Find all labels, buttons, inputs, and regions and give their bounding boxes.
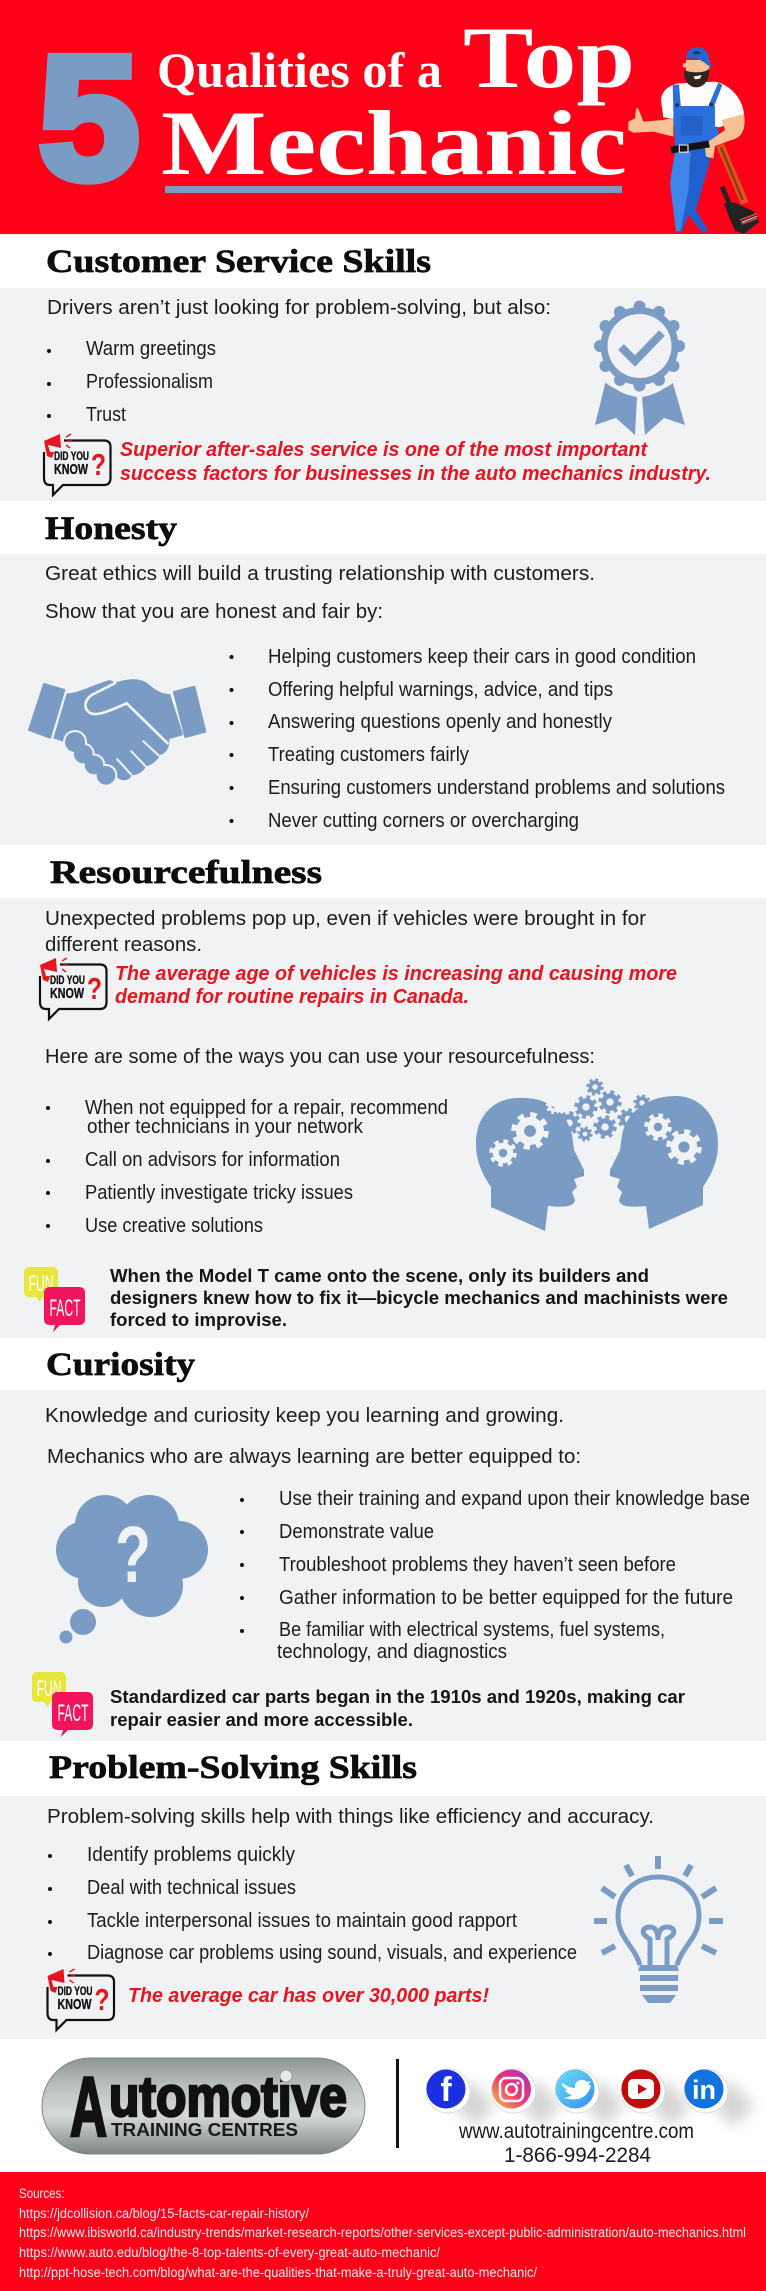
divider xyxy=(396,2059,399,2148)
callout: did you know: demand for routine repairs in Canada. xyxy=(115,986,469,1008)
bullet list: Offering helpful warnings, advice, and tips xyxy=(268,679,613,701)
callout: fun fact xyxy=(32,1672,685,1737)
icon: linkedin xyxy=(684,2070,724,2108)
website: www.autotrainingcentre.com xyxy=(458,2120,694,2143)
icon: fun fact xyxy=(32,1672,93,1737)
bullet list xyxy=(46,1097,448,1237)
bullet list: other technicians in your network xyxy=(87,1116,364,1138)
icon: fun fact: FUN xyxy=(36,1676,62,1701)
section: Curiosity xyxy=(0,1338,766,1741)
bullet list: Answering questions openly and honestly xyxy=(268,711,612,733)
intro text xyxy=(45,908,646,956)
social icons xyxy=(426,2069,754,2128)
icon: did you know: DID YOU xyxy=(58,1986,92,1998)
callout: did you know xyxy=(40,958,677,1019)
icon: light bulb xyxy=(594,1856,723,2003)
icon: did you know: ? xyxy=(91,447,106,482)
list intro: Here are some of the ways you can use your resourcefulness: xyxy=(45,1046,595,1068)
bullet list: Never cutting corners or overcharging xyxy=(268,810,579,832)
icon: handshake xyxy=(29,679,205,787)
illustration: mechanic xyxy=(628,47,759,234)
bullet list: Demonstrate value xyxy=(279,1521,434,1543)
bullet list: Warm greetings xyxy=(86,338,216,360)
bullet list: Use creative solutions xyxy=(85,1215,263,1237)
bullet list: Ensuring customers understand problems and solutions xyxy=(268,777,725,799)
intro text: different reasons. xyxy=(45,934,202,956)
intro text: Show that you are honest and fair by: xyxy=(45,601,383,623)
icon: did you know: KNOW xyxy=(58,1996,92,2013)
intro text: Unexpected problems pop up, even if vehicles were brought in for xyxy=(45,908,646,930)
intro text: Mechanics who are always learning are better equipped to: xyxy=(47,1446,581,1468)
callout: fun fact: repair easier and more accessible. xyxy=(110,1710,413,1730)
bullet list: When not equipped for a repair, recommend xyxy=(85,1097,448,1119)
section: Problem-Solving Skills xyxy=(0,1741,766,2039)
sources panel xyxy=(0,2172,766,2291)
section: Customer Service Skills xyxy=(0,234,766,501)
bullet list: technology, and diagnostics xyxy=(277,1641,507,1663)
bullet list: Helping customers keep their cars in good condition xyxy=(268,646,696,668)
bullet list: Diagnose car problems using sound, visuals, and experience xyxy=(87,1942,577,1964)
icon: thought cloud: ? xyxy=(115,1510,151,1599)
intro text xyxy=(45,563,595,623)
bullet list: Professionalism xyxy=(86,371,213,393)
bullet list xyxy=(230,646,725,832)
bullet list: Gather information to be better equipped for the future xyxy=(279,1587,733,1609)
icon: fun fact: FUN xyxy=(28,1271,54,1296)
icon: did you know xyxy=(40,958,106,1019)
phone: 1-866-994-2284 xyxy=(504,2144,651,2167)
intro text xyxy=(45,1405,581,1468)
bullet list: Treating customers fairly xyxy=(268,744,469,766)
icon: fun fact xyxy=(24,1267,85,1332)
logo: Automotive Training Centres: utomotive xyxy=(109,2065,347,2129)
title: Mechanic: Mechanic xyxy=(161,92,627,194)
icon: fun fact: FACT xyxy=(50,1295,81,1322)
logo: Automotive Training Centres: TRAINING CENTRES xyxy=(111,2120,298,2140)
title underline xyxy=(165,186,622,193)
footer: logo and contact xyxy=(0,2039,766,2172)
sources panel: Sources: xyxy=(19,2186,64,2201)
icon: did you know: KNOW xyxy=(54,461,89,478)
icon: did you know xyxy=(48,1969,114,2030)
sources panel: http://ppt-hose-tech.com/blog/what-are-the-qualities-that-make-a-truly-great-auto-mechanic/ xyxy=(19,2265,537,2280)
heading: Curiosity xyxy=(46,1347,196,1383)
fact text: Standardized car parts began in the 1910s and 1920s, making car xyxy=(110,1687,685,1707)
bullet list: Tackle interpersonal issues to maintain good rapport xyxy=(87,1910,517,1932)
intro text: Drivers aren’t just looking for problem-solving, but also: xyxy=(47,297,551,319)
icon: did you know: DID YOU xyxy=(54,451,89,463)
icon: instagram xyxy=(492,2070,531,2108)
section: Resourcefulness xyxy=(0,845,766,1338)
heading: Resourcefulness xyxy=(50,855,322,891)
fact text: The average car has over 30,000 parts! xyxy=(128,1985,489,2007)
icon: fun fact: FACT xyxy=(58,1700,89,1727)
bullet list: Trust xyxy=(86,404,126,426)
bullet list: Be familiar with electrical systems, fuel systems, xyxy=(279,1619,665,1641)
sources panel: https://www.auto.edu/blog/the-8-top-talents-of-every-great-auto-mechanic/ xyxy=(19,2245,440,2260)
big number 5: 5 xyxy=(38,20,140,216)
heading: Customer Service Skills xyxy=(46,244,431,280)
icon: twitter xyxy=(556,2070,594,2108)
callout: fun fact xyxy=(24,1266,728,1332)
fact text: The average age of vehicles is increasing and causing more xyxy=(115,963,677,985)
icon: did you know: ? xyxy=(87,971,102,1006)
icon: award rosette xyxy=(594,300,685,435)
intro text: Knowledge and curiosity keep you learning and growing. xyxy=(45,1405,564,1427)
bullet list xyxy=(47,338,216,426)
icon: facebook: f xyxy=(440,2071,452,2109)
callout: did you know: success factors for businesses in the auto mechanics industry. xyxy=(120,463,711,485)
fact text: Superior after-sales service is one of the most important xyxy=(120,439,648,461)
callout: fun fact: designers knew how to fix it—bicycle mechanics and machinists were xyxy=(110,1288,728,1308)
icon: did you know: DID YOU xyxy=(50,975,85,987)
bullet list xyxy=(48,1844,577,1964)
fact text: When the Model T came onto the scene, only its builders and xyxy=(110,1266,649,1286)
intro text: Great ethics will build a trusting relationship with customers. xyxy=(45,563,595,585)
header banner xyxy=(0,0,766,234)
heading: Honesty xyxy=(45,511,178,547)
icon: linkedin: in xyxy=(692,2075,716,2105)
callout: fun fact: forced to improvise. xyxy=(110,1310,287,1330)
bullet list: Deal with technical issues xyxy=(87,1877,296,1899)
bullet list: Identify problems quickly xyxy=(87,1844,295,1866)
icon: thought cloud xyxy=(56,1495,208,1644)
bullet list xyxy=(240,1488,750,1663)
logo: Automotive Training Centres: A xyxy=(70,2060,107,2154)
bullet list: Patiently investigate tricky issues xyxy=(85,1182,353,1204)
sources panel: https://jdcollision.ca/blog/15-facts-car-repair-history/ xyxy=(19,2206,309,2221)
icon: did you know xyxy=(44,434,110,495)
bullet list: Call on advisors for information xyxy=(85,1149,340,1171)
icon: did you know: ? xyxy=(94,1982,110,2017)
icon: facebook xyxy=(426,2070,466,2109)
intro text: Problem-solving skills help with things like efficiency and accuracy. xyxy=(47,1806,654,1828)
callout: did you know xyxy=(44,434,711,495)
icon: youtube xyxy=(622,2070,660,2108)
icon: heads with gears xyxy=(476,1080,718,1231)
logo: Automotive Training Centres xyxy=(42,2058,365,2154)
heading: Problem-Solving Skills xyxy=(49,1750,417,1786)
bullet list: Troubleshoot problems they haven’t seen before xyxy=(279,1554,676,1576)
section: Honesty xyxy=(0,501,766,845)
icon: did you know: KNOW xyxy=(50,985,85,1002)
callout: did you know xyxy=(48,1969,489,2030)
title: Top: Top xyxy=(463,10,635,107)
title: Qualities of a: Qualities of a xyxy=(157,42,442,98)
